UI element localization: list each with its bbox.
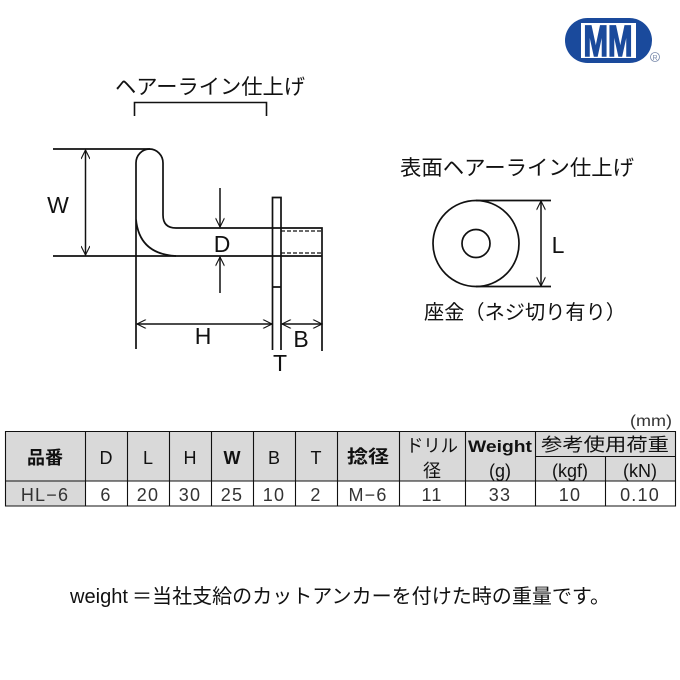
table values: 25	[221, 485, 243, 505]
table headers: T	[310, 448, 322, 468]
table headers: (g)	[489, 461, 511, 481]
table headers: W	[224, 448, 240, 468]
table headers: 捻径	[347, 447, 389, 467]
heading: hairline finish: ヘアーライン仕上げ	[115, 76, 305, 99]
table values: M−6	[348, 485, 388, 505]
hook outline	[136, 149, 322, 351]
extension lines	[53, 149, 322, 256]
logo: MM: R	[652, 55, 658, 62]
dimension T: T	[273, 350, 287, 376]
table header background	[5, 432, 675, 481]
table values	[21, 485, 660, 505]
table grid	[6, 431, 676, 506]
dimension L: L	[552, 232, 565, 258]
table headers: 径	[423, 461, 441, 481]
table: specifications	[5, 431, 676, 506]
table headers: (kgf)	[552, 461, 588, 481]
table values: 20	[137, 485, 159, 505]
dimension W	[47, 150, 86, 255]
caption: washer with thread: 座金（ネジ切り有り）	[424, 301, 626, 324]
bracket: finish range	[134, 102, 266, 116]
table values: 10	[263, 485, 285, 505]
table headers: L	[143, 448, 153, 468]
table values: 33	[489, 485, 511, 505]
table values: 30	[179, 485, 201, 505]
table headers: ドリル	[406, 436, 458, 456]
dimension D: D	[214, 231, 230, 257]
dimension H: H	[195, 323, 211, 349]
drawing: L-shaped hook side view	[53, 149, 322, 351]
table headers: Weight	[468, 437, 532, 456]
washer plate	[272, 198, 281, 350]
dimension L	[541, 201, 565, 286]
table values: 6	[100, 485, 112, 505]
table headers: H	[184, 448, 196, 468]
heading: surface hairline finish: 表面ヘアーライン仕上げ	[400, 157, 634, 180]
footnote: ＝当社支給のカットアンカーを付けた時の重量です。	[132, 585, 610, 608]
table values: 0.10	[620, 485, 660, 505]
dimension B	[282, 324, 322, 352]
thread dashes	[281, 231, 322, 253]
table headers: D	[100, 448, 112, 468]
dimension D	[214, 188, 230, 293]
drawing: washer front view	[433, 200, 551, 286]
table values: 10	[559, 485, 581, 505]
table headers: 参考使用荷重	[541, 435, 669, 455]
dimension W: W	[47, 192, 69, 218]
table headers: 品番	[27, 448, 63, 468]
dimension B: B	[293, 326, 309, 352]
table values: 11	[421, 485, 443, 505]
table values: 2	[310, 485, 322, 505]
unit label: (mm)	[630, 413, 672, 430]
logo: MM: MM	[584, 17, 632, 66]
table values: HL−6	[21, 485, 69, 505]
table headers: B	[268, 448, 280, 468]
product cell background	[5, 481, 85, 506]
dimension H	[137, 323, 272, 349]
table headers	[27, 435, 669, 481]
footnote: weight	[69, 586, 128, 608]
table headers: (kN)	[623, 461, 657, 481]
